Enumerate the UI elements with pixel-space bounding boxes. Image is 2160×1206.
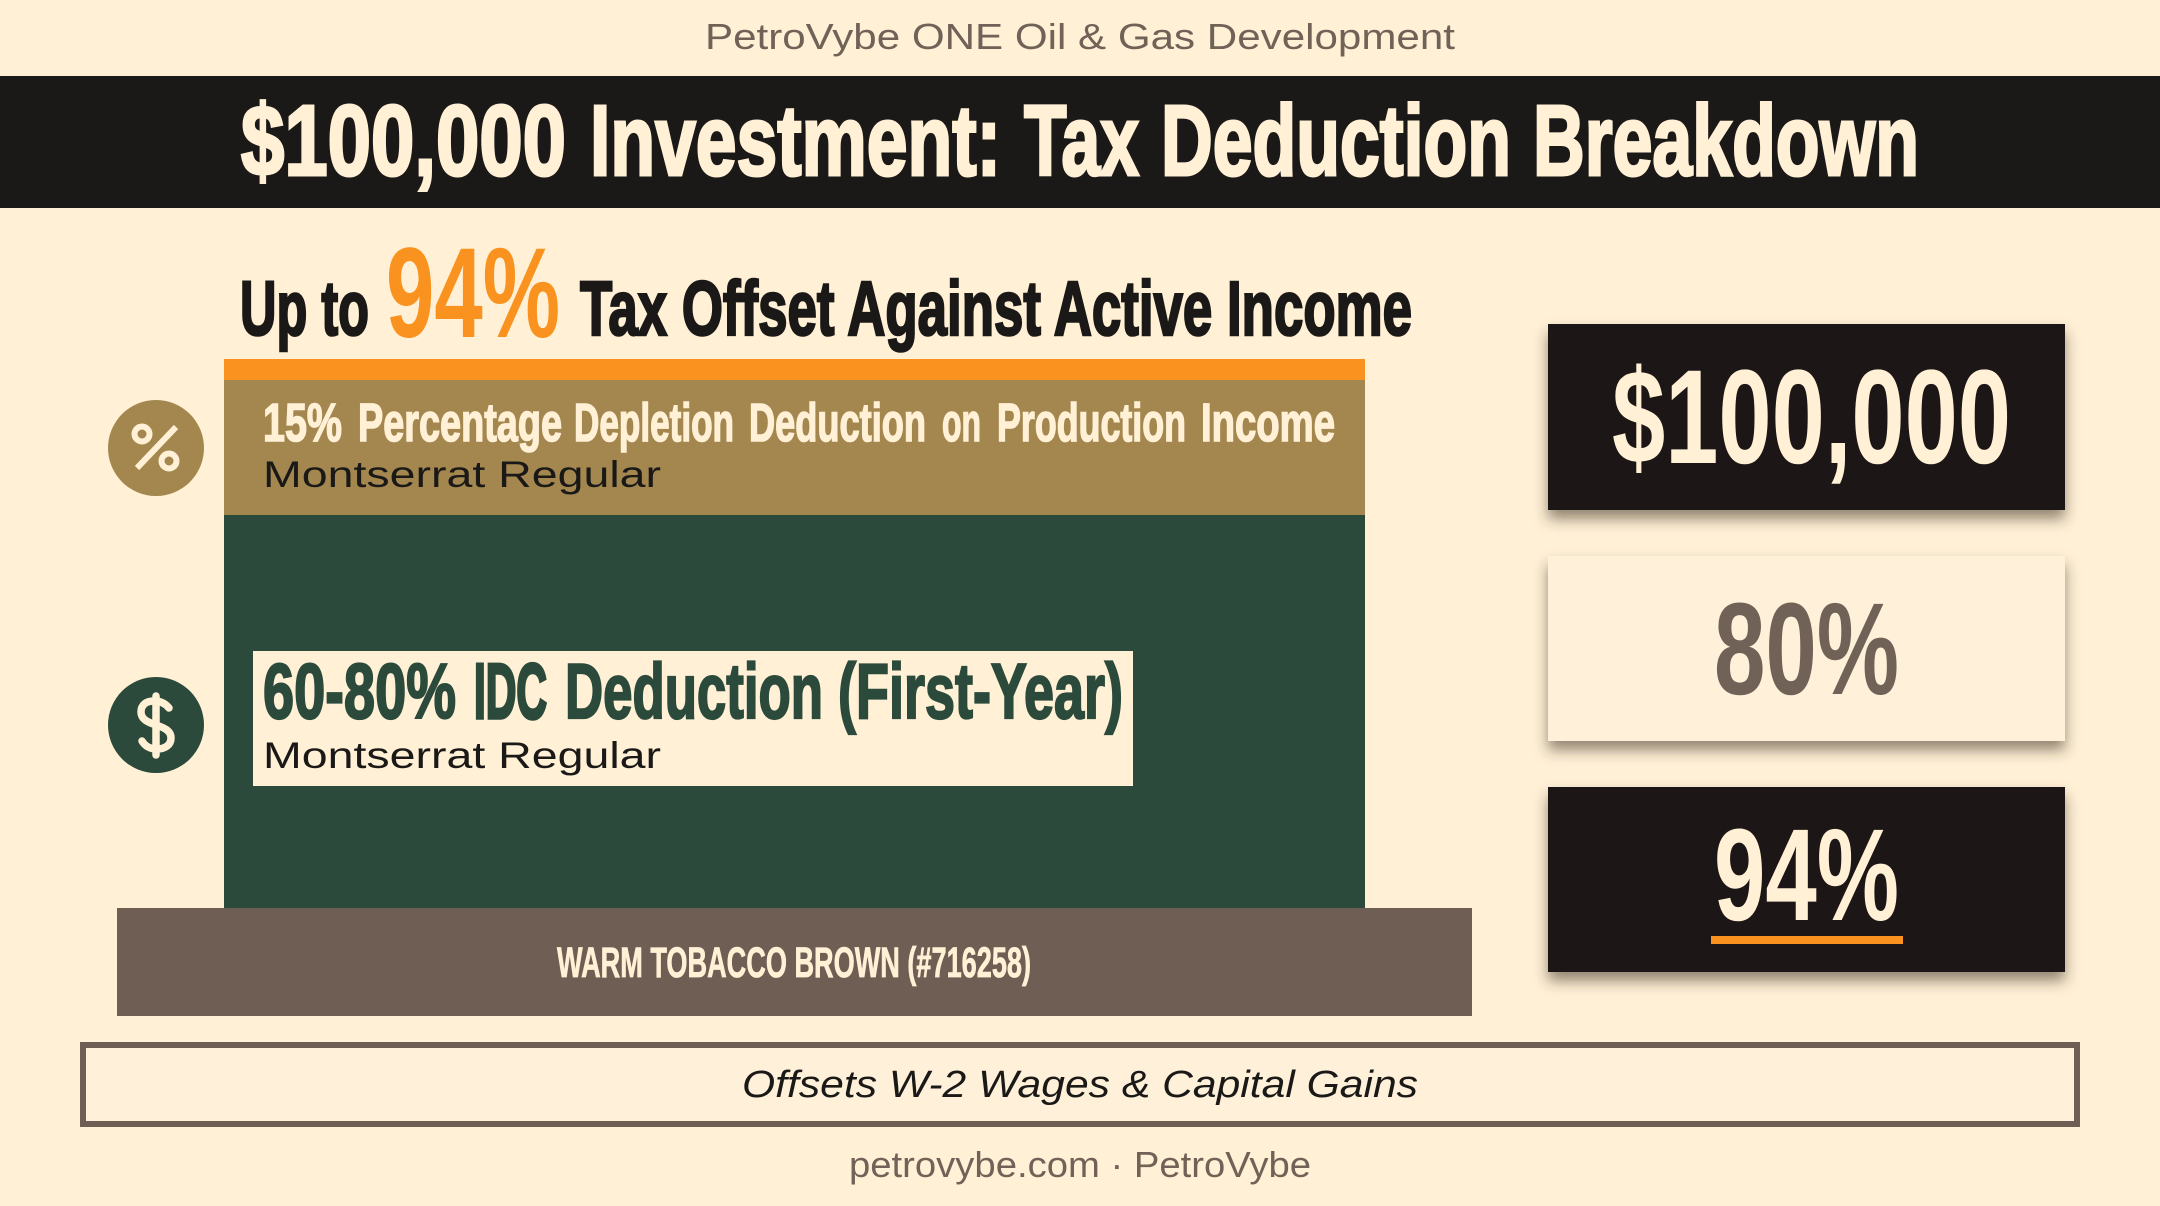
stacked deduction chart	[117, 359, 1472, 1016]
stat card: 94%: 94%	[1714, 801, 1899, 948]
icon: percent	[108, 400, 204, 496]
stat card: $100,000	[1548, 324, 2065, 510]
panel: IDC layer	[224, 515, 1365, 909]
title: Tax	[1024, 85, 1139, 197]
depletion heading: Depletion	[574, 393, 734, 453]
subheading: 94% highlight: 94%	[386, 222, 560, 365]
depletion heading: Percentage	[358, 393, 562, 453]
callout: offsets: Offsets W-2 Wages & Capital Gains	[742, 1064, 1418, 1106]
IDC heading: 60-80%	[263, 647, 456, 735]
title band	[0, 76, 2160, 208]
stat card: 80%	[1548, 556, 2065, 741]
IDC label box	[253, 651, 1133, 786]
stat card: 80%: 80%	[1714, 575, 1899, 722]
depletion heading: Deduction	[749, 393, 926, 453]
panel: base layer	[117, 908, 1472, 1016]
callout: offsets	[83, 1045, 2077, 1124]
IDC heading: (First-Year)	[838, 647, 1123, 735]
IDC heading: Deduction	[565, 647, 823, 735]
panel: depletion layer	[224, 380, 1365, 515]
depletion sublabel: Montserrat Regular	[263, 454, 661, 495]
title: Investment:	[590, 85, 1001, 197]
IDC heading	[263, 647, 1123, 735]
footer: petrovybe.com · PetroVybe	[849, 1144, 1311, 1185]
title	[241, 85, 1919, 197]
depletion heading: on	[942, 393, 981, 453]
depletion heading	[263, 393, 1335, 453]
orange cap bar	[224, 359, 1365, 380]
title: $100,000	[241, 85, 566, 197]
stat card: $100,000: $100,000	[1612, 343, 2011, 492]
orange underline	[1711, 936, 1903, 944]
subheading: tax offset text: Tax Offset Against Active Income	[580, 266, 1412, 352]
depletion heading: 15%	[263, 393, 342, 453]
title: Deduction	[1161, 85, 1511, 197]
subheading: up to: Up to	[240, 266, 369, 352]
icon: dollar	[108, 677, 204, 773]
depletion heading: Production	[997, 393, 1186, 453]
stat card: 94%	[1548, 787, 2065, 972]
depletion heading: Income	[1201, 393, 1335, 453]
base label: WARM TOBACCO BROWN (#716258)	[557, 939, 1031, 987]
IDC sublabel: Montserrat Regular	[263, 735, 661, 776]
subheading	[240, 222, 1412, 365]
IDC heading: IDC	[474, 647, 547, 735]
header: brand line: PetroVybe ONE Oil & Gas Development	[705, 16, 1455, 57]
title: Breakdown	[1533, 85, 1919, 197]
